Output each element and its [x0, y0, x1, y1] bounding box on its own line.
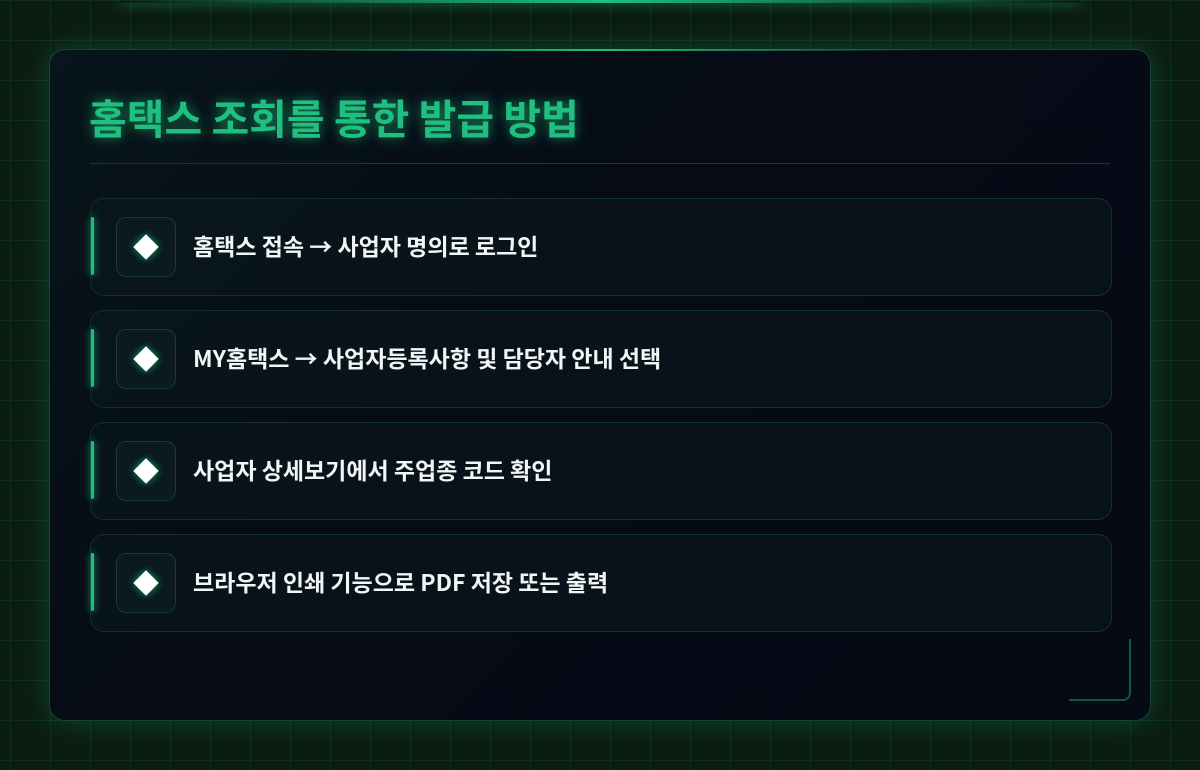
step 4: [90, 534, 1112, 632]
step 2: [90, 310, 1112, 408]
text: step 3: 사업자 상세보기에서 주업종 코드 확인: [193, 452, 552, 486]
text: step 2: MY홈택스 → 사업자등록사항 및 담당자 안내 선택: [193, 340, 661, 374]
icon: diamond: [116, 217, 176, 277]
text: step 4: 브라우저 인쇄 기능으로 PDF 저장 또는 출력: [193, 564, 608, 598]
step 3: [90, 422, 1112, 520]
step 1: [90, 198, 1112, 296]
icon: diamond: [116, 553, 176, 613]
text: step 1: 홈택스 접속 → 사업자 명의로 로그인: [193, 228, 538, 262]
icon: diamond: [116, 441, 176, 501]
title: 홈택스 조회를 통한 발급 방법: [89, 86, 579, 146]
icon: diamond: [116, 329, 176, 389]
